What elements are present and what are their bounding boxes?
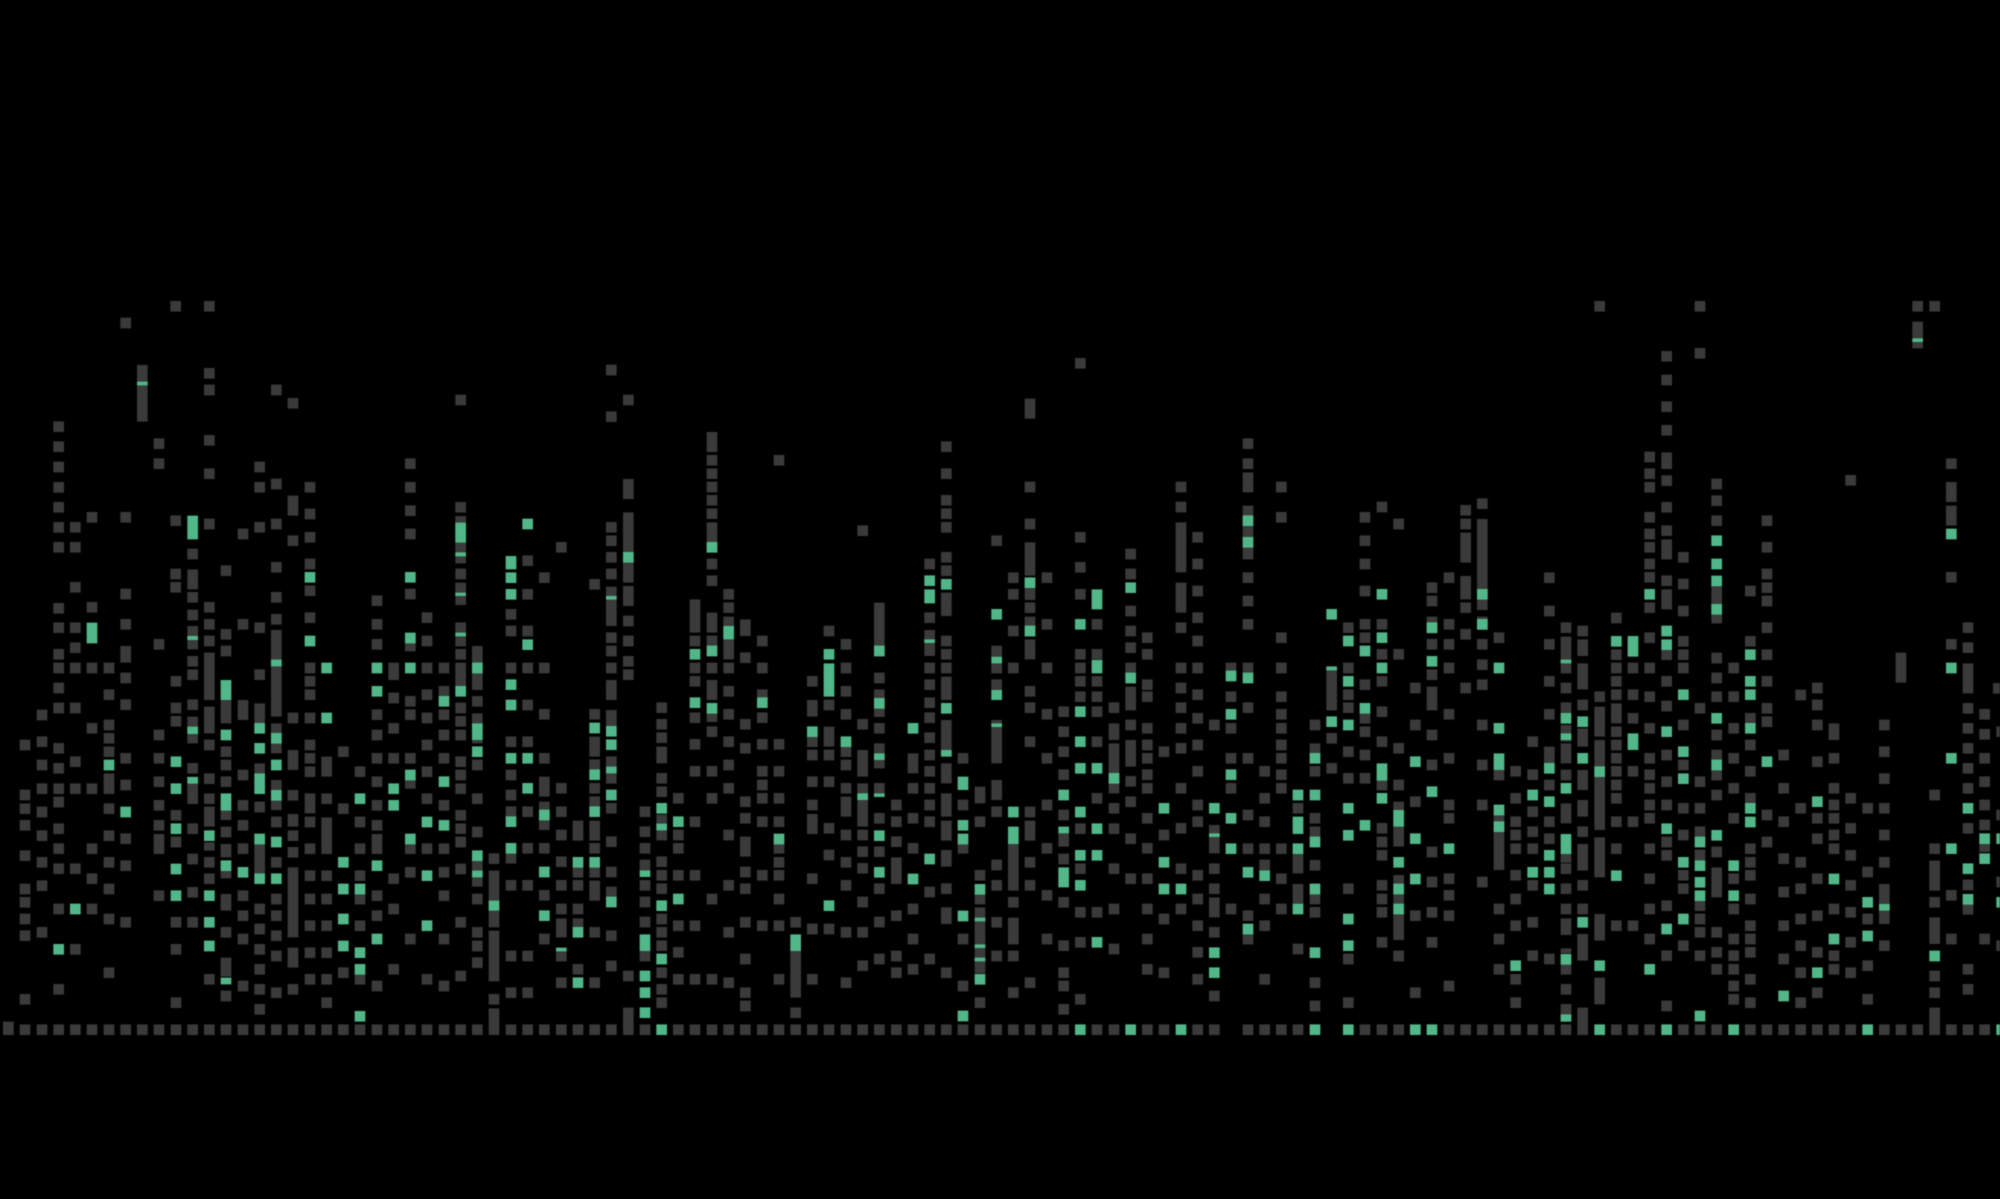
- marks: centre-left columns, upper part: [511, 370, 997, 700]
- marks: centre-right columns, upper part: [1013, 363, 1499, 700]
- marks: left columns, upper part: [59, 306, 461, 608]
- marks: left columns, lower part with baseline: [8, 615, 494, 1035]
- marks: centre-left columns, lower part with baseline: [511, 700, 997, 1035]
- marks: centre-right columns, lower part with baseline: [1013, 705, 1499, 1030]
- marks: right columns, upper part: [1549, 306, 1998, 697]
- marks: right columns, lower part with baseline: [1516, 703, 2000, 1035]
